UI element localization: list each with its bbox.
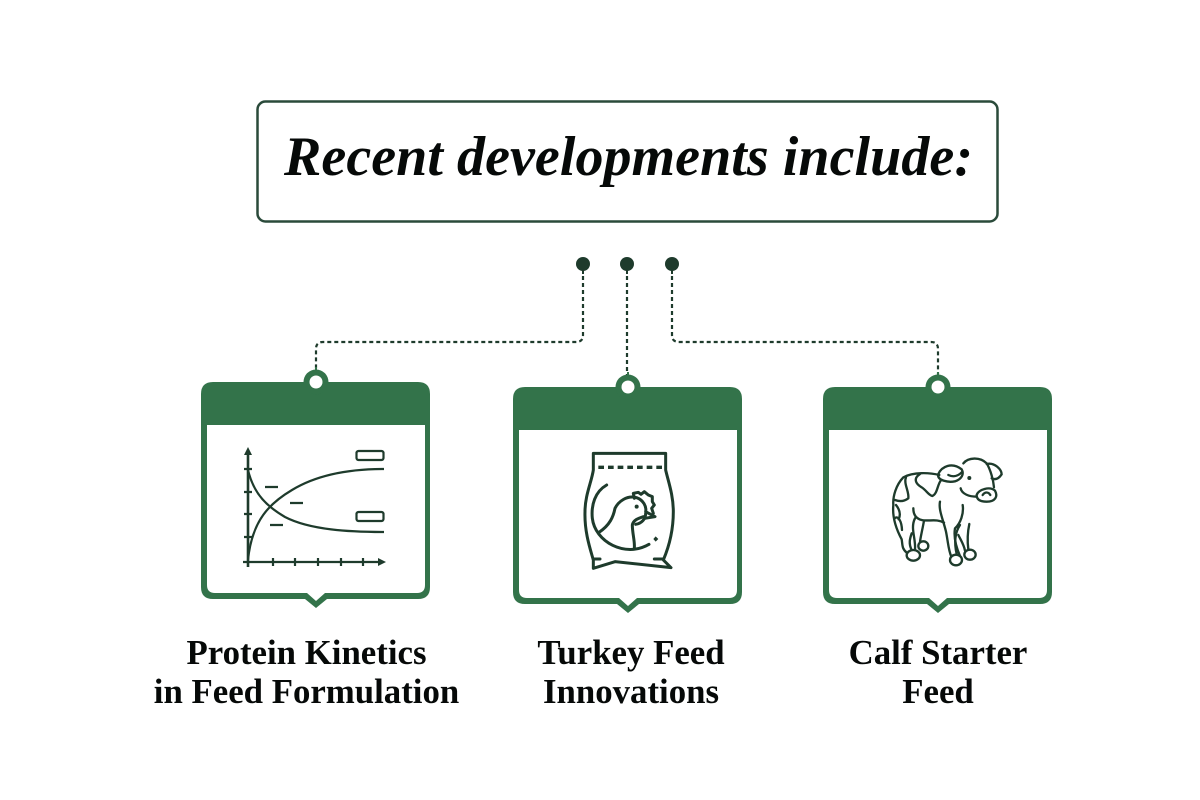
- panel: protein kinetics card: [201, 367, 430, 608]
- connector: left: [316, 257, 590, 372]
- icon: feed bag with bird: [585, 453, 673, 568]
- label: protein kinetics: in Feed Formulation: [154, 672, 459, 711]
- connector: right: [665, 257, 938, 376]
- icon: calf: [893, 459, 1002, 565]
- label: turkey feed: Innovations: [543, 672, 719, 711]
- label: protein kinetics: Protein Kinetics: [186, 633, 426, 672]
- title box: [258, 102, 998, 222]
- label: turkey feed: Turkey Feed: [537, 633, 725, 672]
- connector: middle: [620, 257, 634, 376]
- icon: kinetics chart: [243, 447, 386, 567]
- label: calf starter: Feed: [902, 672, 974, 711]
- panel: turkey feed card: [513, 372, 742, 613]
- label: calf starter: Calf Starter: [849, 633, 1027, 672]
- title: Recent developments include:: [283, 126, 973, 188]
- panel: calf starter card: [823, 372, 1052, 613]
